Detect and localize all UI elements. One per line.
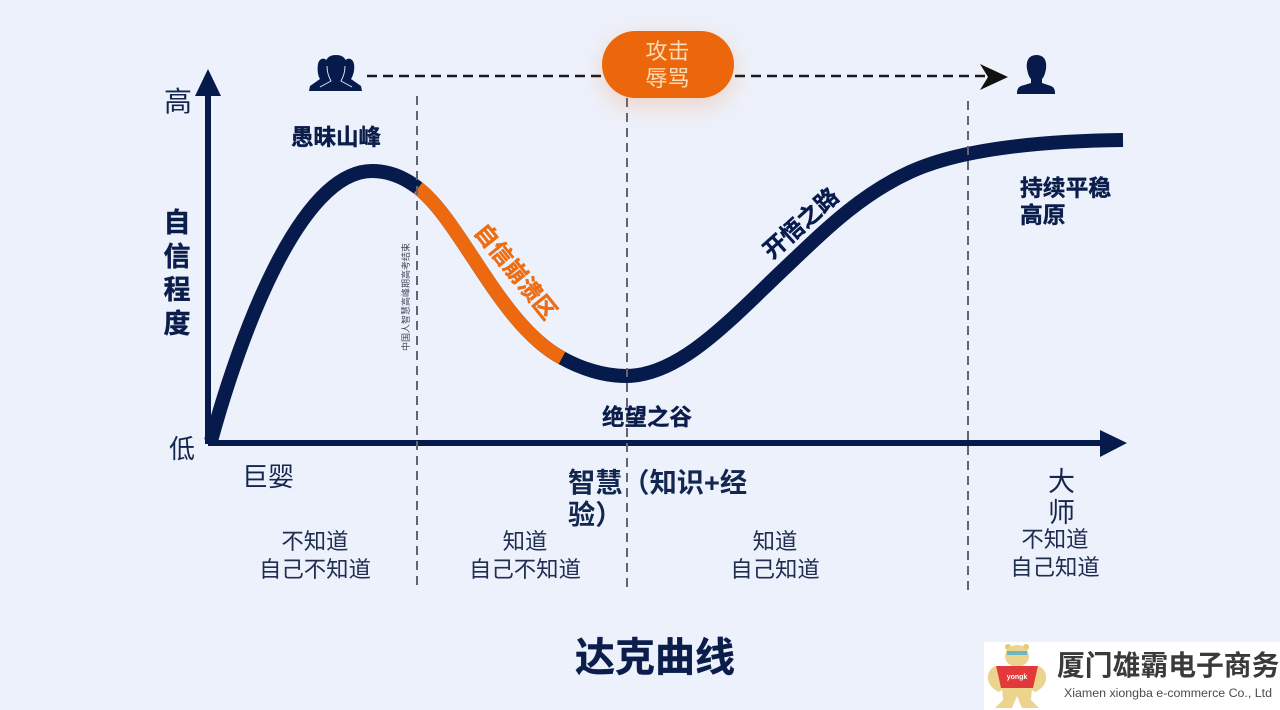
watermark logo panel xyxy=(984,642,1280,710)
stage 4 text: 自己知道 xyxy=(1010,555,1100,580)
y axis title: 自信程度 xyxy=(164,208,190,338)
x axis title: 验） xyxy=(568,499,622,530)
attack pill xyxy=(602,31,734,106)
stage divider: right xyxy=(967,101,969,593)
x label: baby: 巨婴 xyxy=(242,462,294,492)
axis label: low: 低 xyxy=(169,434,195,464)
stage 1 text: 不知道 xyxy=(281,529,349,554)
label: valley of despair: 绝望之谷 xyxy=(602,405,692,430)
stage 1 text: 自己不知道 xyxy=(259,557,371,582)
orange collapse segment xyxy=(418,188,562,358)
stage 3 text: 知道 xyxy=(753,529,797,554)
stage 3 text: 自己知道 xyxy=(730,557,820,582)
stage 2 text: 自己不知道 xyxy=(469,557,581,582)
stage 2 text xyxy=(469,529,581,582)
x axis title: 智慧（知识+经 xyxy=(568,467,747,498)
label: plateau xyxy=(1020,175,1111,228)
company name: 厦门雄霸电子商务 xyxy=(1057,650,1279,681)
icon: bear mascot: yongk xyxy=(1007,674,1027,681)
stage 3 text xyxy=(730,529,820,582)
stage 4 text: 不知道 xyxy=(1021,527,1089,552)
icon: single person xyxy=(1017,55,1055,94)
attack pill: 攻击 xyxy=(645,39,690,64)
x label: master: 师 xyxy=(1048,498,1075,528)
curve label: enlightenment road: 开悟之路 xyxy=(758,183,844,264)
y axis arrow xyxy=(195,69,221,444)
icon: crowd xyxy=(309,55,362,91)
stage 1 text xyxy=(259,529,371,582)
curve label: collapse zone: 自信崩溃区 xyxy=(469,219,562,325)
dashed arrow line xyxy=(367,64,1008,90)
x axis arrow xyxy=(208,430,1127,457)
x label: master: 大 xyxy=(1048,467,1075,497)
confidence curve xyxy=(211,140,1123,441)
stage 2 text: 知道 xyxy=(503,529,547,554)
label: peak of stupidity: 愚昧山峰 xyxy=(291,125,381,150)
icon: bear mascot xyxy=(988,644,1046,708)
axis label: high: 高 xyxy=(164,86,192,117)
attack pill: 辱骂 xyxy=(645,66,690,91)
label: plateau: 高原 xyxy=(1020,202,1066,228)
company english name: Xiamen xiongba e-commerce Co., Ltd xyxy=(1064,686,1272,700)
x axis title xyxy=(568,467,747,530)
stage divider: left xyxy=(416,96,418,588)
x label: master xyxy=(1048,467,1075,528)
stage divider: middle xyxy=(626,98,628,590)
main title: 达克曲线 xyxy=(575,636,735,680)
small vertical note: 中国人智慧高峰期高考结束 xyxy=(400,243,411,351)
stage 4 text xyxy=(1010,527,1100,580)
label: plateau: 持续平稳 xyxy=(1020,175,1111,201)
